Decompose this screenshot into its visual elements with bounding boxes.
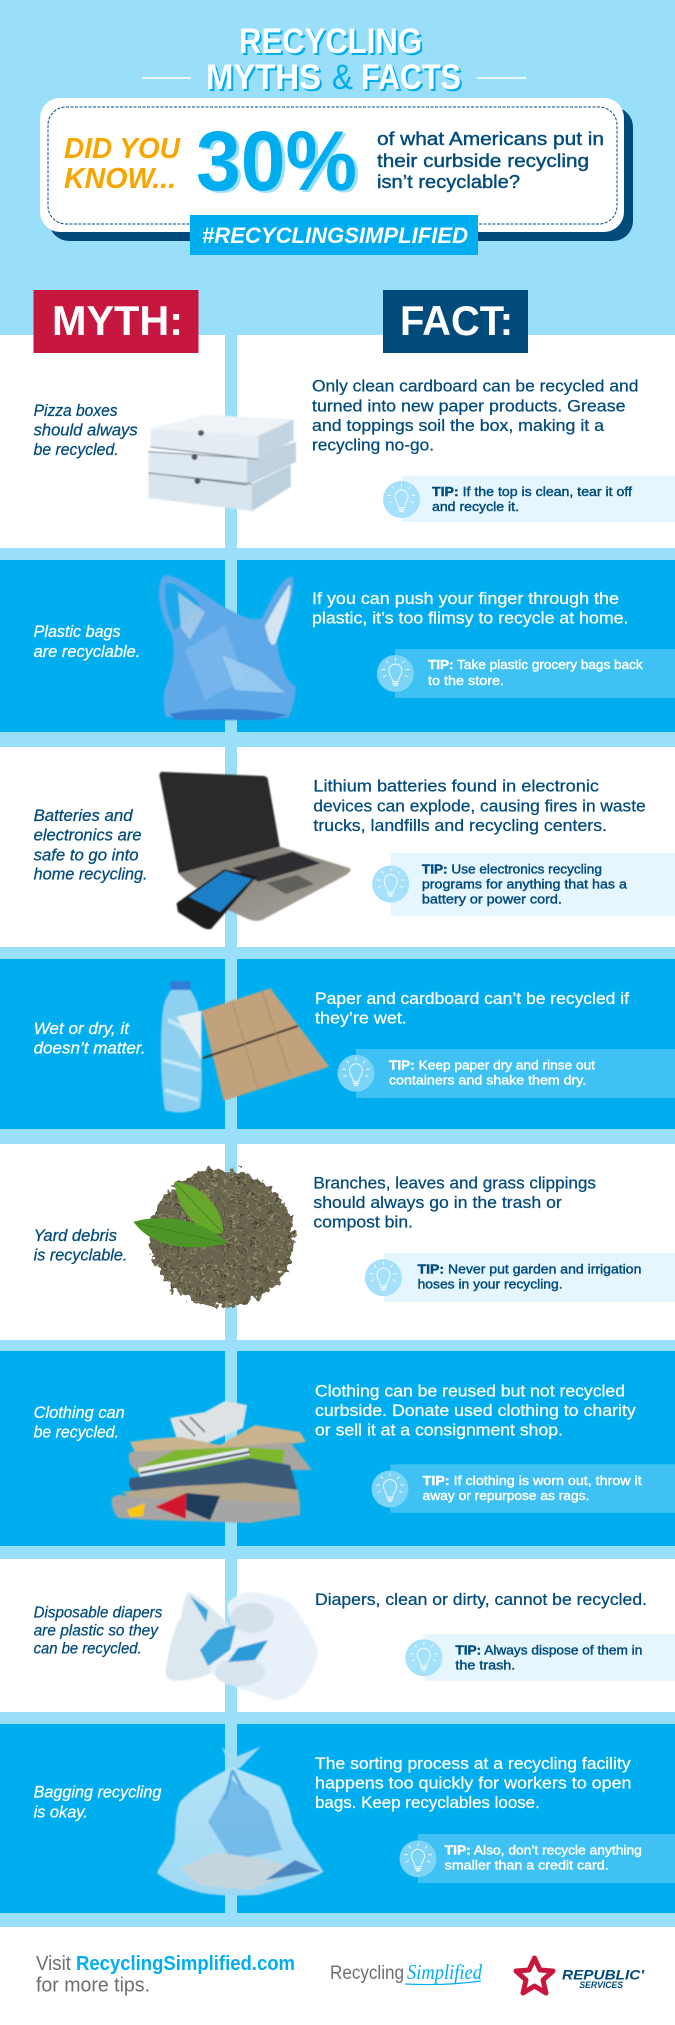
myth heading: MYTH:	[52, 297, 183, 344]
myth text	[34, 1404, 125, 1442]
tip	[405, 1634, 675, 1681]
tip: TIP: Also, don’t recycle anything	[445, 1843, 642, 1857]
fact text	[313, 778, 646, 835]
tip	[383, 476, 675, 522]
tip	[338, 1049, 675, 1098]
logo: republic services	[516, 1958, 645, 1993]
myth text: Wet or dry, it	[34, 1020, 130, 1038]
tip	[377, 649, 675, 698]
fact text: The sorting process at a recycling facility	[315, 1755, 631, 1773]
title: FACTS	[361, 58, 461, 97]
tip: TIP: Keep paper dry and rinse out	[389, 1058, 596, 1072]
statistic description: of what Americans put in	[377, 129, 604, 149]
image: pizza boxes	[148, 415, 296, 511]
tip	[365, 1253, 675, 1302]
fact text: Clothing can be reused but not recycled	[315, 1382, 625, 1400]
panel: clothing	[34, 1382, 675, 1523]
tip: away or repurpose as rags.	[423, 1489, 589, 1503]
footer call to action	[36, 1953, 295, 1997]
myth text: be recycled.	[34, 441, 119, 459]
did you know label	[64, 133, 181, 195]
icon: star	[516, 1958, 553, 1993]
fact text: Only clean cardboard can be recycled and	[312, 378, 638, 396]
myth text	[34, 1020, 146, 1057]
did you know label: KNOW...	[64, 163, 176, 195]
statistic description	[377, 129, 604, 192]
myth text: are plastic so they	[34, 1622, 159, 1639]
tip: to the store.	[428, 674, 504, 688]
fact text	[315, 1382, 637, 1440]
myth text: is recyclable.	[34, 1247, 127, 1265]
image: pile of clothing	[112, 1401, 312, 1523]
image: plastic bag	[159, 575, 296, 720]
fact text: should always go in the trash or	[313, 1194, 562, 1212]
myth text	[34, 402, 138, 459]
panel: pizza boxes	[34, 378, 675, 522]
tip	[372, 1464, 675, 1513]
title: RECYCLING	[239, 22, 422, 61]
tip: TIP: Use electronics recycling	[422, 862, 602, 876]
myth text	[34, 1604, 163, 1657]
logo: recycling simplified: Simplified	[407, 1960, 482, 1984]
fact text: curbside. Donate used clothing to charity	[315, 1402, 637, 1420]
tip: programs for anything that has a	[422, 878, 627, 892]
panel: plastic bags	[34, 575, 675, 720]
myth text: Disposable diapers	[34, 1604, 163, 1621]
panel: bagging recycling	[34, 1747, 675, 1896]
footer call to action: for more tips.	[36, 1975, 150, 1997]
myth text: Pizza boxes	[34, 402, 118, 420]
image: bag of recycling	[157, 1747, 324, 1896]
fact text: Diapers, clean or dirty, cannot be recycled.	[315, 1591, 647, 1609]
fact text	[312, 590, 628, 628]
myth text: safe to go into	[34, 846, 139, 864]
myth text: home recycling.	[34, 866, 148, 884]
tip: TIP: Always dispose of them in	[455, 1643, 642, 1657]
myth text: Bagging recycling	[34, 1784, 162, 1802]
fact text: bags. Keep recyclables loose.	[315, 1794, 540, 1812]
callout card: did you know	[40, 98, 633, 241]
fact text: recycling no-go.	[312, 437, 434, 455]
myth text: be recycled.	[34, 1424, 119, 1442]
myth text: should always	[34, 422, 138, 440]
image: laptop and phone	[159, 772, 350, 929]
title: &	[332, 58, 353, 97]
title: FACTS	[363, 60, 463, 99]
fact text	[312, 378, 638, 455]
fact text: and toppings soil the box, making it a	[312, 417, 605, 435]
tip: hoses in your recycling.	[418, 1277, 563, 1291]
panel: diapers	[34, 1591, 675, 1700]
fact text	[315, 990, 629, 1028]
fact heading: FACT:	[400, 297, 513, 344]
30 percent statistic: 30%	[199, 116, 360, 210]
tip: battery or power cord.	[422, 893, 562, 907]
did you know label: DID YOU	[64, 133, 181, 165]
panel: yard debris	[34, 1169, 675, 1307]
statistic description: their curbside recycling	[377, 151, 589, 171]
fact text: turned into new paper products. Grease	[312, 397, 626, 415]
logo: republic services: REPUBLIC'	[562, 1966, 645, 1982]
tip: smaller than a credit card.	[445, 1858, 609, 1872]
myth text: Clothing can	[34, 1404, 125, 1422]
tip: TIP: If the top is clean, tear it off	[432, 485, 633, 499]
tip: and recycle it.	[432, 500, 519, 514]
tip: TIP: If clothing is worn out, throw it	[423, 1474, 642, 1488]
myth heading	[34, 290, 198, 353]
panel: batteries and electronics	[34, 772, 675, 929]
logo: republic services: SERVICES	[579, 1980, 623, 1990]
footer call to action: Visit	[36, 1953, 71, 1975]
fact text: Branches, leaves and grass clippings	[313, 1175, 596, 1193]
fact text: If you can push your finger through the	[312, 590, 619, 608]
statistic description: isn’t recyclable?	[377, 172, 520, 192]
myth text: can be recycled.	[34, 1640, 142, 1657]
myth text: electronics are	[34, 827, 142, 845]
myth text: Batteries and	[34, 807, 133, 825]
fact text: Lithium batteries found in electronic	[313, 778, 599, 796]
tip: TIP: Take plastic grocery bags back	[428, 658, 644, 672]
fact text: compost bin.	[313, 1213, 413, 1231]
title: RECYCLING	[241, 24, 424, 63]
myth text: Plastic bags	[34, 623, 121, 641]
myth text	[34, 623, 140, 661]
image: yard debris and leaves	[133, 1169, 294, 1307]
fact text	[315, 1755, 632, 1812]
myth text	[34, 1784, 162, 1821]
title: MYTHS	[206, 58, 321, 97]
tip: the trash.	[455, 1658, 515, 1672]
logo: recycling simplified: Recycling	[330, 1963, 404, 1984]
panel: wet or dry	[34, 981, 675, 1113]
image: bottle and cardboard	[161, 981, 329, 1113]
tip	[372, 853, 675, 916]
fact text: plastic, it’s too flimsy to recycle at home.	[312, 610, 628, 628]
hashtag banner: #RECYCLINGSIMPLIFIED	[202, 223, 468, 248]
myth text: Yard debris	[34, 1227, 117, 1245]
tip: containers and shake them dry.	[389, 1074, 586, 1088]
fact text	[313, 1175, 596, 1231]
title	[142, 22, 526, 99]
image: diapers	[166, 1592, 318, 1700]
myth text	[34, 807, 148, 884]
title: MYTHS	[208, 60, 323, 99]
tip	[400, 1834, 675, 1883]
footer call to action: RecyclingSimplified.com	[76, 1953, 295, 1975]
tip: TIP: Never put garden and irrigation	[418, 1262, 641, 1276]
fact text: they’re wet.	[315, 1010, 407, 1028]
fact text: Paper and cardboard can’t be recycled if	[315, 990, 629, 1008]
logo: recycling simplified	[330, 1960, 482, 1985]
fact text: happens too quickly for workers to open	[315, 1775, 632, 1793]
myth text: is okay.	[34, 1803, 88, 1821]
myth text	[34, 1227, 127, 1265]
hashtag banner	[190, 215, 478, 255]
fact text: trucks, landfills and recycling centers.	[313, 817, 607, 835]
fact text: or sell it at a consignment shop.	[315, 1422, 563, 1440]
30 percent statistic: 30%	[196, 114, 357, 208]
fact heading	[383, 290, 528, 353]
myth text: are recyclable.	[34, 643, 140, 661]
myth text: doesn’t matter.	[34, 1039, 146, 1057]
fact text: devices can explode, causing fires in waste	[313, 797, 646, 815]
